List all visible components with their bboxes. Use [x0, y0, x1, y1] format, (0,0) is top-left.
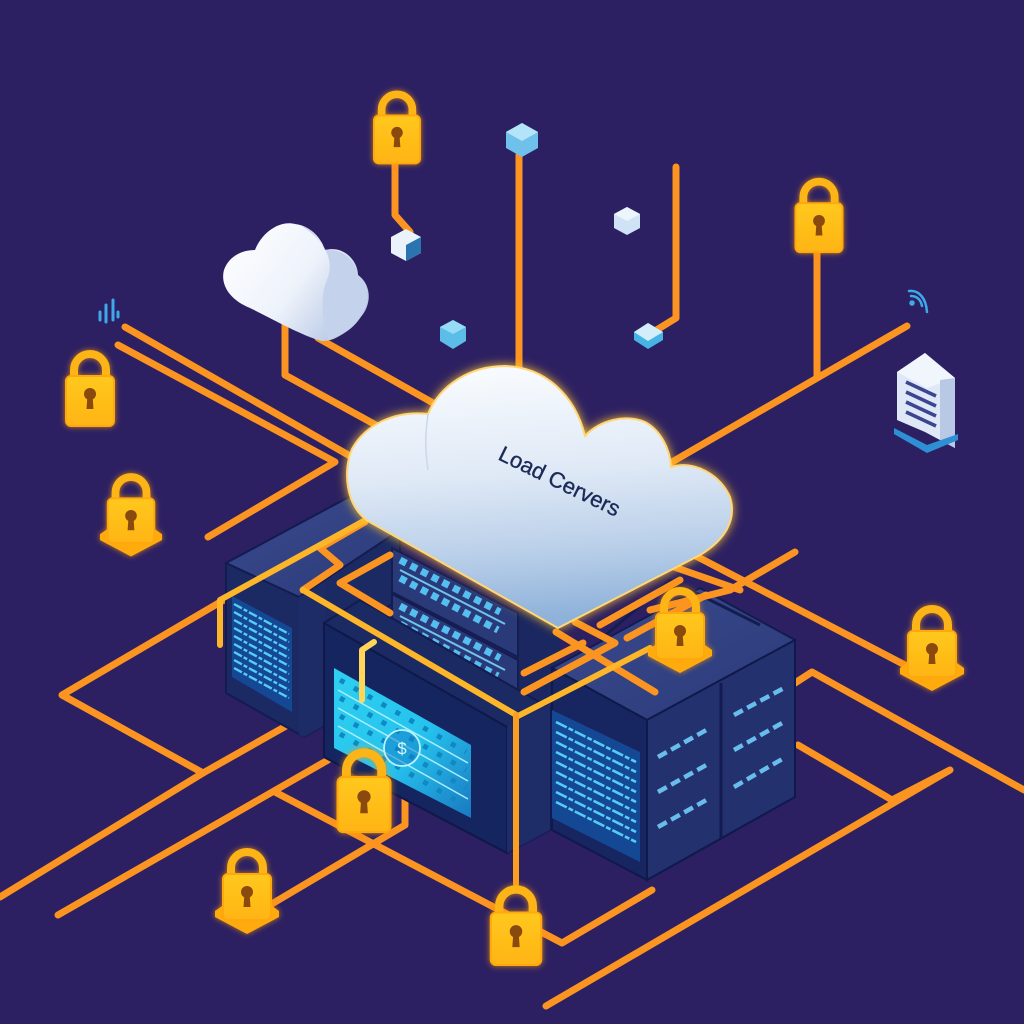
icon: wifi	[909, 291, 927, 312]
right block screen	[552, 710, 640, 862]
lock: top centre	[374, 94, 420, 163]
rack lights	[400, 560, 500, 676]
server: centre rack stack	[392, 548, 560, 725]
main glowing screen: $	[397, 739, 407, 758]
server: middle front block	[324, 600, 550, 853]
server icon: far right	[894, 353, 958, 453]
cube: white under lock	[391, 229, 421, 261]
icon: signal bars	[100, 300, 118, 322]
lock: on right server	[648, 591, 712, 673]
cube: blue centre	[440, 320, 466, 349]
server: right block	[552, 580, 795, 880]
lock: bottom centre	[491, 889, 541, 965]
cloud label: Load Cervers	[495, 441, 624, 521]
rack indicator dashes	[658, 688, 784, 827]
wires over servers	[220, 512, 730, 884]
main glowing screen	[334, 668, 471, 818]
lock: far left upper	[66, 354, 114, 426]
main cloud	[347, 366, 732, 628]
cube: top centre	[506, 123, 538, 157]
lock: over main screen	[338, 753, 390, 832]
small cloud	[223, 223, 369, 341]
lock: far left lower	[100, 477, 162, 556]
server: left block	[226, 490, 415, 737]
left block screen	[232, 596, 292, 712]
cube: pale right	[614, 207, 640, 235]
lock: top right	[795, 182, 843, 252]
cube: blue on wire	[634, 323, 663, 349]
lock: bottom left	[215, 852, 279, 934]
lock: far right	[900, 609, 964, 691]
